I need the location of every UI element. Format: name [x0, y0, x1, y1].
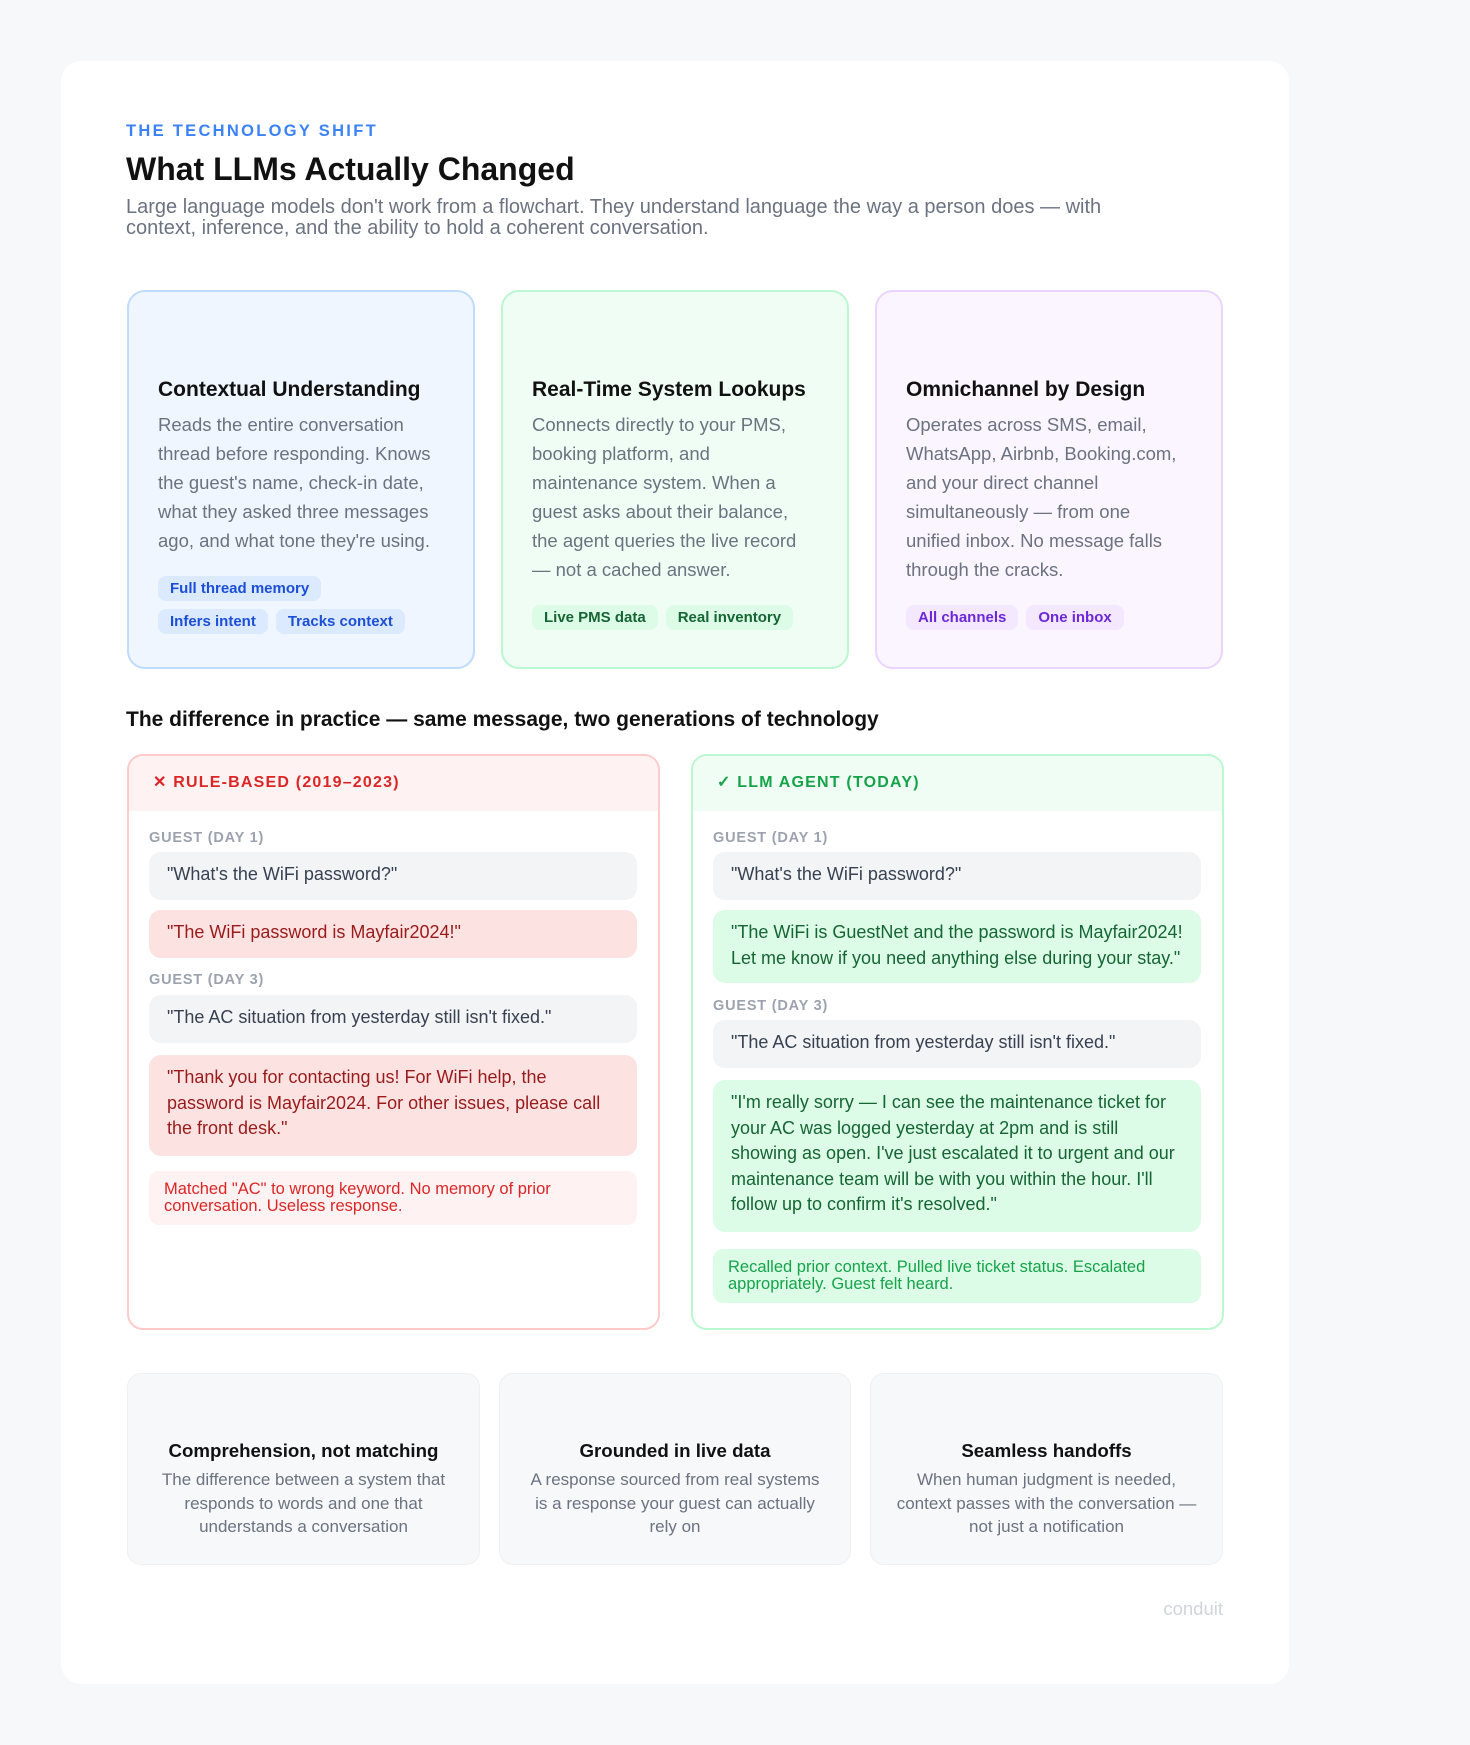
panel: rule-based: "What's the WiFi password?" — [167, 864, 397, 884]
panel: llm agent: GUEST (DAY 3) — [713, 998, 828, 1014]
bottom card: handoffs: When human judgment is needed, context passes with the conversation — not just a notification — [897, 1470, 1196, 1536]
main card — [61, 61, 1289, 1684]
bottom card: grounded — [499, 1373, 851, 1565]
footer brand: conduit — [1163, 1598, 1223, 1619]
panel: llm agent — [691, 754, 1224, 1330]
panel: llm agent: "The WiFi is GuestNet and the password is Mayfair2024! Let me know if you need anything else during your stay." — [731, 922, 1183, 968]
tags — [158, 576, 405, 634]
tags: Full thread memory — [170, 580, 309, 597]
note: Recalled prior context. Pulled live ticket status. Escalated appropriately. Guest felt heard. — [728, 1258, 1145, 1293]
card: omnichannel — [875, 290, 1223, 669]
card: contextual understanding: Reads the entire conversation thread before responding. Knows the guest's name, check-in date, what they asked three messages ago, and what tone they're using. — [158, 414, 431, 551]
bottom card: handoffs: Seamless handoffs — [961, 1440, 1132, 1461]
tags: Real inventory — [678, 609, 781, 626]
note — [713, 1249, 1201, 1303]
bottom card: grounded: A response sourced from real systems is a response your guest can actually rely on — [530, 1470, 820, 1536]
section heading: The difference in practice — same message, two generations of technology — [126, 708, 879, 731]
panel: llm agent: "I'm really sorry — I can see the maintenance ticket for your AC was logged yesterday at 2pm and is still showing as open. I've just escalated it to urgent and our maintenance team will be with you within the hour. I'll follow up to confirm it's resolved." — [731, 1092, 1175, 1214]
card: real-time lookups: Real-Time System Lookups — [532, 378, 806, 401]
panel: llm agent: "What's the WiFi password?" — [731, 864, 961, 884]
bottom card: comprehension: Comprehension, not matching — [169, 1440, 438, 1461]
panel: rule-based: GUEST (DAY 3) — [149, 972, 264, 988]
tags: Live PMS data — [544, 609, 646, 626]
note: Matched "AC" to wrong keyword. No memory of prior conversation. Useless response. — [164, 1180, 551, 1215]
bottom card: handoffs — [870, 1373, 1223, 1565]
panel: llm agent: ✓ LLM AGENT (TODAY) — [717, 774, 920, 791]
panel: rule-based — [127, 754, 660, 1330]
bottom card: comprehension — [127, 1373, 480, 1565]
card: contextual understanding — [127, 290, 475, 669]
card: contextual understanding: Contextual Understanding — [158, 378, 421, 401]
tags: One inbox — [1038, 609, 1112, 626]
subtitle: Large language models don't work from a flowchart. They understand language the way a person does — with context, inference, and the ability to hold a coherent conversation. — [126, 196, 1101, 239]
tags — [906, 605, 1124, 630]
panel: rule-based: "The WiFi password is Mayfair2024!" — [167, 922, 461, 942]
panel: rule-based: "The AC situation from yesterday still isn't fixed." — [167, 1007, 551, 1027]
card: real-time lookups — [501, 290, 849, 669]
tags: Infers intent — [170, 613, 256, 630]
note — [149, 1171, 637, 1225]
bottom card: comprehension: The difference between a system that responds to words and one that understands a conversation — [162, 1470, 445, 1536]
card: omnichannel: Operates across SMS, email, WhatsApp, Airbnb, Booking.com, and your direct channel simultaneously — from one unified inbox. No message falls through the cracks. — [906, 414, 1176, 580]
card: omnichannel: Omnichannel by Design — [906, 378, 1145, 401]
eyebrow: THE TECHNOLOGY SHIFT — [126, 122, 378, 140]
tags: Tracks context — [288, 613, 393, 630]
panel: rule-based: GUEST (DAY 1) — [149, 830, 264, 846]
panel: llm agent: "The AC situation from yesterday still isn't fixed." — [731, 1032, 1115, 1052]
bottom card: grounded: Grounded in live data — [579, 1440, 771, 1461]
panel: rule-based: ✕ RULE-BASED (2019–2023) — [153, 774, 400, 791]
card: real-time lookups: Connects directly to your PMS, booking platform, and maintenance system. When a guest asks about their balance, the agent queries the live record — not a cached answer. — [532, 414, 796, 580]
panel: llm agent: GUEST (DAY 1) — [713, 830, 828, 846]
tags: All channels — [918, 609, 1006, 626]
panel: rule-based: "Thank you for contacting us! For WiFi help, the password is Mayfair2024. For other issues, please call the front desk." — [167, 1067, 600, 1138]
tags — [532, 605, 793, 630]
title: What LLMs Actually Changed — [126, 151, 575, 187]
